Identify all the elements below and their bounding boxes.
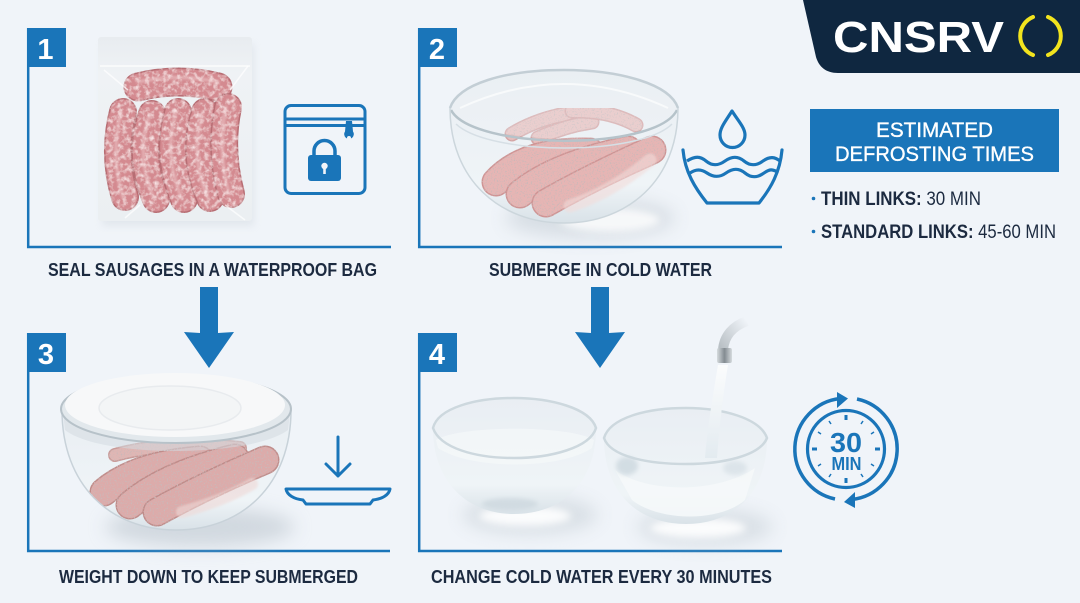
photo: sausages in vacuum bag xyxy=(98,37,254,226)
panel frame 3 xyxy=(28,333,390,551)
icon: 30 minute timer with cycle arrows: MIN xyxy=(832,454,862,474)
step number 1: 1 xyxy=(37,34,54,66)
arrow: step 2 to step 4 xyxy=(575,287,625,368)
step number 3 xyxy=(27,333,66,372)
caption step 3: WEIGHT DOWN TO KEEP SUBMERGED xyxy=(59,566,358,587)
step number 2 xyxy=(418,28,457,67)
step number 2: 2 xyxy=(429,34,445,66)
step number 4: 4 xyxy=(429,339,445,371)
heading box xyxy=(810,109,1059,172)
caption step 4: CHANGE COLD WATER EVERY 30 MINUTES xyxy=(431,566,772,587)
panel: estimated defrosting times xyxy=(810,109,1059,243)
caption step 2: SUBMERGE IN COLD WATER xyxy=(489,259,712,280)
caption step 1: SEAL SAUSAGES IN A WATERPROOF BAG xyxy=(48,259,377,280)
step number 4 xyxy=(418,333,457,372)
photo: two glass bowls and faucet xyxy=(433,321,773,545)
arrow: step 1 to step 3 xyxy=(184,287,234,368)
list item: standard links: STANDARD LINKS: 45-60 MIN xyxy=(821,222,1056,243)
heading box: DEFROSTING TIMES xyxy=(835,143,1034,166)
icon: water drop over basin xyxy=(683,111,782,203)
icon: 30 minute timer with cycle arrows xyxy=(795,392,897,508)
list item: thin links: THIN LINKS: 30 MIN xyxy=(821,189,981,210)
step number 1 xyxy=(27,28,66,67)
step number 3: 3 xyxy=(38,339,54,371)
panel: step 3 weight down xyxy=(27,333,390,587)
logo: CNSRV badge xyxy=(803,0,1080,73)
panel frame 1 xyxy=(28,28,391,247)
photo: plate on glass bowl xyxy=(61,373,295,547)
photo: glass bowl with sausages xyxy=(450,70,678,238)
panel: step 4 change water xyxy=(418,321,897,587)
panel: step 1 seal in bag xyxy=(27,28,391,280)
panel: step 2 submerge xyxy=(418,28,782,280)
logo: CNSRV badge: CNSRV xyxy=(833,13,1005,62)
heading box: ESTIMATED xyxy=(876,119,993,142)
icon: 30 minute timer with cycle arrows: 30 xyxy=(830,427,862,458)
panel frame 4 xyxy=(419,333,782,551)
icon: zip bag with padlock xyxy=(285,106,365,194)
icon: plate with down arrow xyxy=(286,437,390,504)
panel frame 2 xyxy=(419,28,782,247)
